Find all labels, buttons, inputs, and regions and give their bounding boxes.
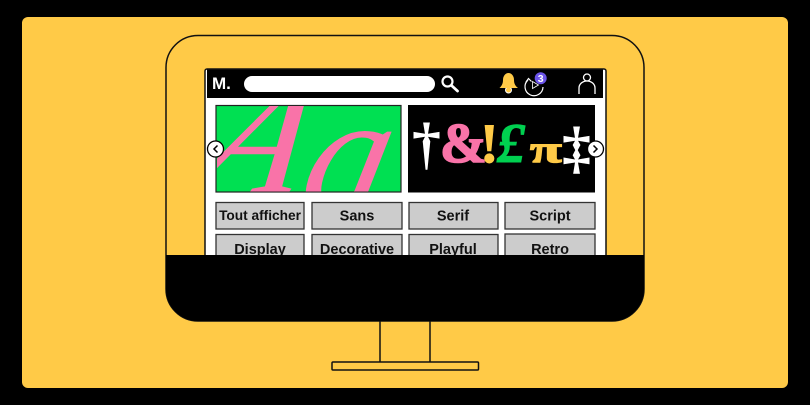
category buttons: [215, 202, 596, 255]
button: Retro: Retro: [531, 242, 569, 258]
button: Tout afficher: [216, 202, 304, 229]
icon: search: [442, 76, 458, 91]
carousel card: green Aa specimen: [215, 104, 402, 193]
button: Sans: [312, 202, 402, 229]
icon: user profile: [579, 74, 595, 94]
icon: notification bell: [500, 73, 518, 93]
button: Serif: Serif: [437, 208, 469, 224]
carousel card: black glyph specimen: &: [440, 113, 487, 175]
button: Decorative: Decorative: [320, 242, 394, 258]
carousel card: black glyph specimen: †: [412, 111, 441, 176]
carousel card: black glyph specimen: [408, 105, 595, 192]
logo: M.: [212, 74, 231, 93]
button: Display: Display: [234, 242, 286, 258]
button: Sans: Sans: [340, 208, 374, 224]
carousel card: black glyph specimen: £: [496, 113, 526, 175]
monitor stand: [332, 321, 478, 370]
monitor body: [166, 36, 644, 321]
carousel card: green Aa specimen: A: [158, 41, 360, 230]
icon: history with badge: [525, 72, 547, 96]
icon: history with badge: 3: [538, 73, 544, 85]
button: Script: [505, 202, 595, 229]
carousel arrow right: [588, 141, 604, 157]
navigation bar: [207, 69, 603, 98]
monitor chin: [166, 255, 644, 321]
screen: [206, 70, 606, 255]
button: Retro: [504, 233, 596, 255]
button: Display: [215, 234, 305, 255]
carousel arrow left: [208, 141, 224, 157]
carousel card: green Aa specimen: a: [288, 61, 413, 249]
screen outline: [205, 69, 606, 255]
carousel card: black glyph specimen: !: [480, 113, 499, 175]
search field: [244, 76, 435, 92]
button: Playful: Playful: [429, 242, 477, 258]
carousel card: black glyph specimen: π: [530, 128, 562, 171]
carousel card: black glyph specimen: ‡: [562, 115, 591, 180]
button: Serif: [409, 202, 498, 229]
button: Decorative: [311, 234, 403, 255]
button: Playful: [408, 234, 499, 255]
button: Script: Script: [529, 208, 571, 224]
button: Tout afficher: Tout afficher: [219, 208, 302, 223]
